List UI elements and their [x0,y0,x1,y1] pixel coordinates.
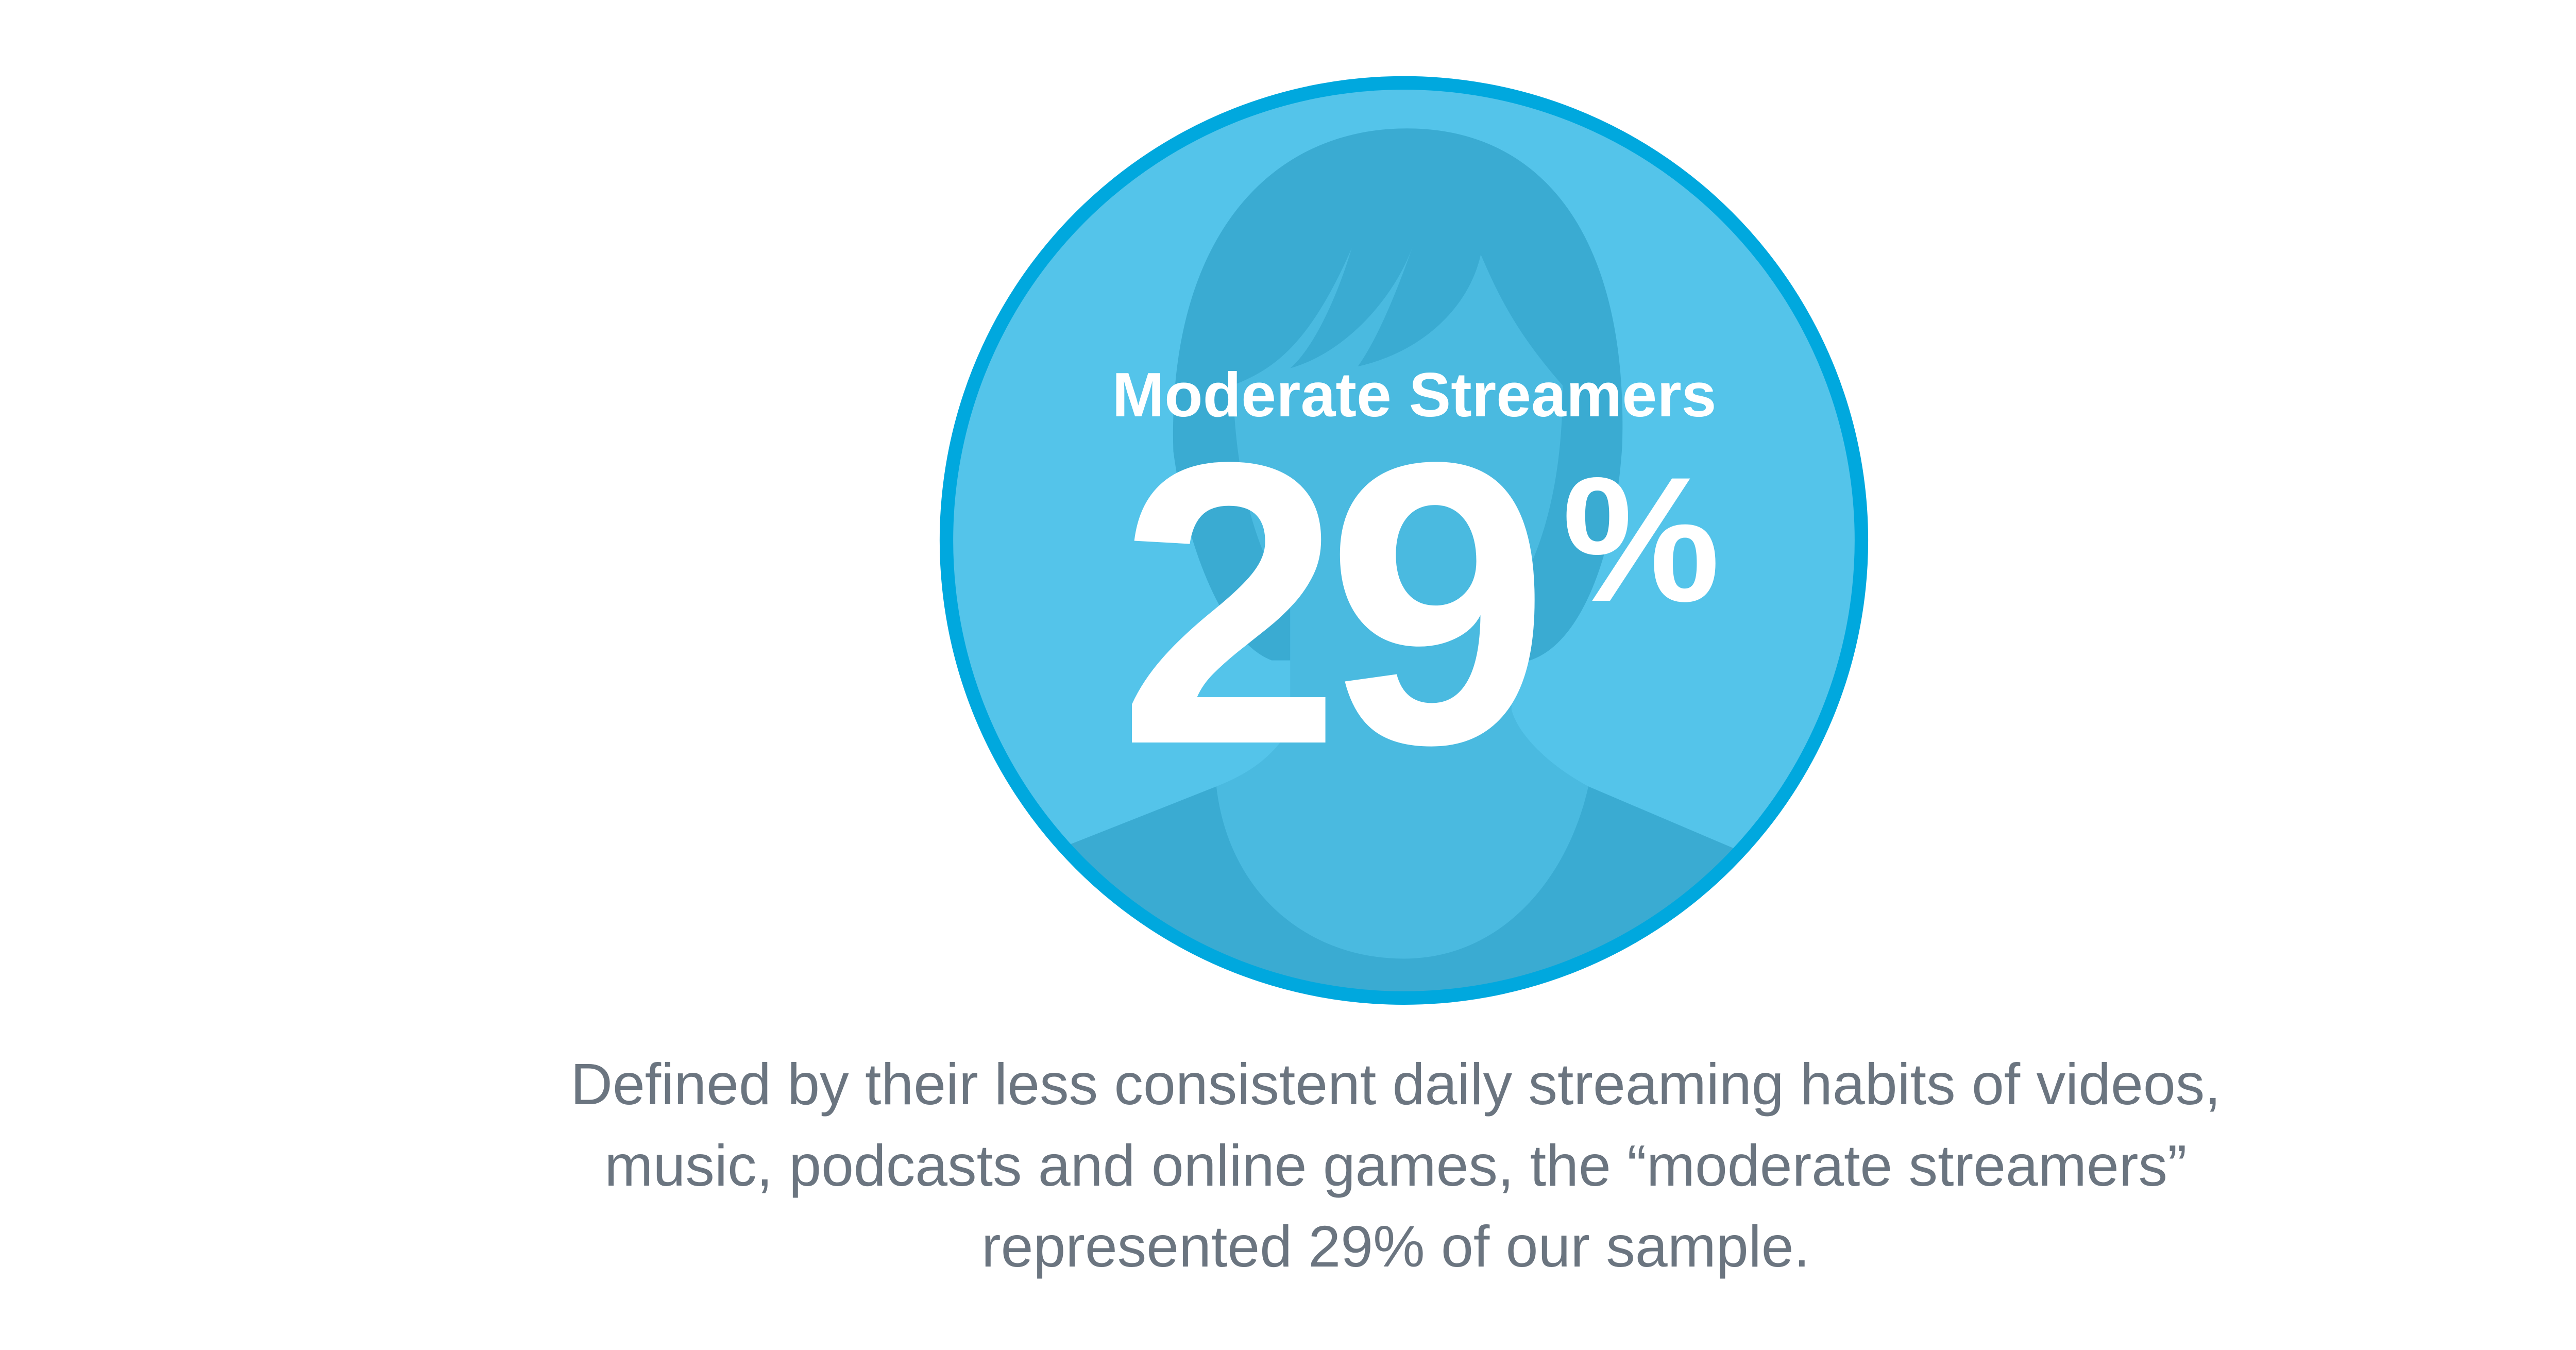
big number: 29%: 29 [1118,379,1534,828]
big number: 29%: % [1562,441,1720,639]
big number: 29% [1118,379,1720,828]
text block: description: represented 29% of our sample. [981,1214,1810,1279]
text block: description [570,1052,2221,1279]
panel: circle portrait [940,76,1868,1005]
text block: description: music, podcasts and online games, the “moderate streamers” [604,1133,2187,1198]
text block: description: Defined by their less consistent daily streaming habits of videos, [570,1052,2221,1117]
circle background [946,83,1861,998]
icon: person silhouette [1071,128,1733,991]
heading: Moderate Streamers: Moderate Streamers [1112,360,1717,430]
circle outline [946,83,1861,998]
